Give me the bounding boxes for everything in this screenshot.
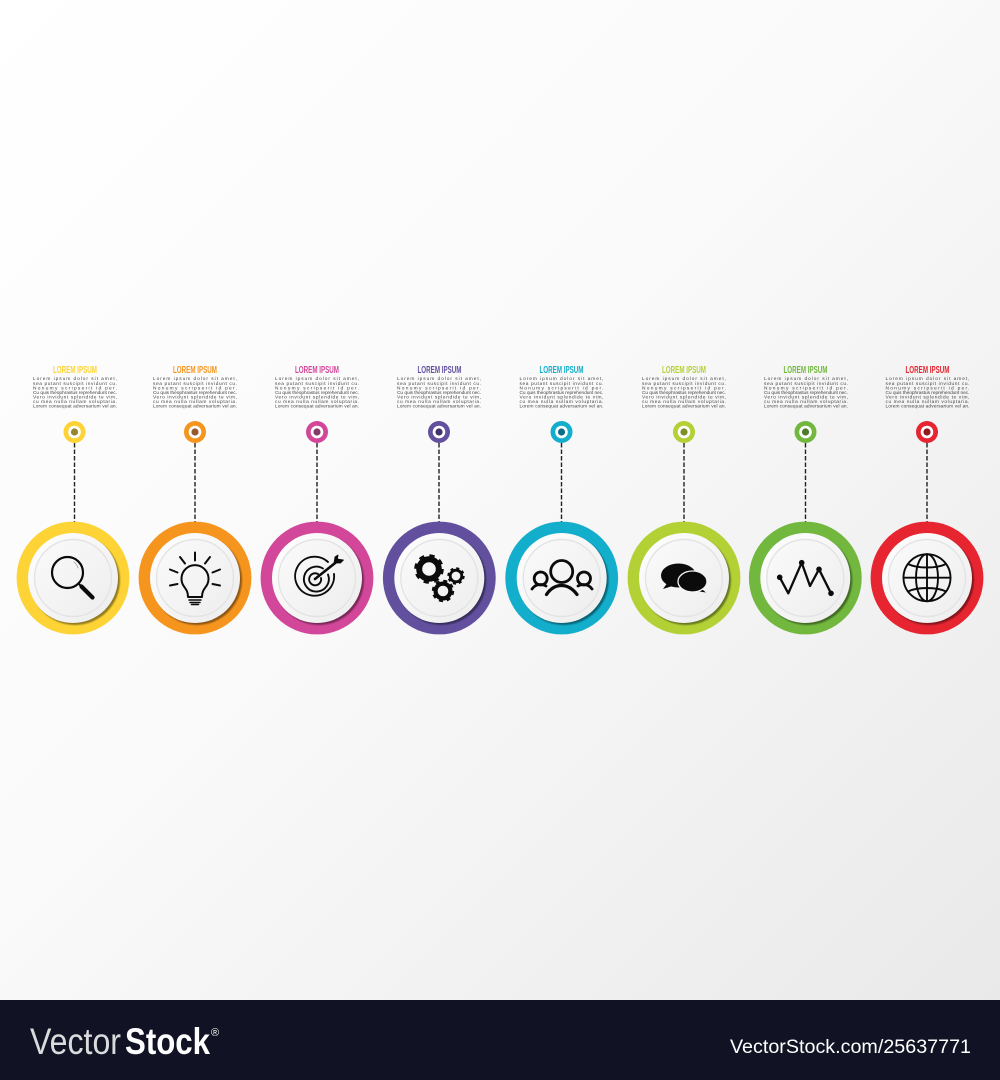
- text block: Lorem consequat adversarium vel an.: [642, 404, 726, 410]
- logo wordmark: Vector: [30, 1021, 121, 1062]
- text block: sea putant suscipit invidunt cu.: [275, 381, 359, 387]
- text block: Cu quis theophrastus reprehendunt nec.: [33, 390, 117, 396]
- marker: [184, 421, 206, 443]
- text block: cu mea nulla nullam voluptaria.: [642, 399, 726, 405]
- step 2: idea: [139, 365, 251, 634]
- ring: [17, 522, 129, 634]
- text block: Vero invidunt splendide te vim,: [153, 394, 237, 400]
- text block: [33, 376, 117, 410]
- text block: cu mea nulla nullam voluptaria.: [764, 399, 848, 405]
- ring: [871, 522, 983, 634]
- dashed connector: [926, 443, 928, 522]
- text block: Lorem consequat adversarium vel an.: [33, 404, 117, 410]
- icon: light bulb: [170, 552, 220, 604]
- text block: Cu quis theophrastus reprehendunt nec.: [520, 390, 604, 396]
- dashed connector: [438, 443, 440, 522]
- text block: Lorem ipsum dolor sit amet,: [397, 376, 481, 382]
- text block: Lorem ipsum dolor sit amet,: [153, 376, 237, 382]
- text block: [886, 376, 970, 410]
- text block: sea putant suscipit invidunt cu.: [520, 381, 604, 387]
- text block: cu mea nulla nullam voluptaria.: [153, 399, 237, 405]
- dashed connector: [74, 443, 76, 522]
- text block: Nonumy scripserit id per.: [153, 386, 237, 392]
- text block: [520, 376, 604, 410]
- text block: Vero invidunt splendide te vim,: [764, 394, 848, 400]
- step 6: chat: [628, 365, 740, 634]
- marker: [64, 421, 86, 443]
- text block: [153, 376, 237, 410]
- ring: [749, 522, 862, 634]
- text block: Cu quis theophrastus reprehendunt nec.: [886, 390, 970, 396]
- ring: [505, 522, 618, 634]
- heading: LOREM IPSUM: [540, 365, 584, 376]
- footer bar: [0, 1000, 1000, 1080]
- text block: sea putant suscipit invidunt cu.: [33, 381, 117, 387]
- icon: speech bubbles: [661, 564, 707, 592]
- text block: Lorem consequat adversarium vel an.: [886, 404, 970, 410]
- marker: [550, 421, 572, 443]
- text block: Lorem ipsum dolor sit amet,: [642, 376, 726, 382]
- text block: Nonumy scripserit id per.: [886, 386, 970, 392]
- text block: Cu quis theophrastus reprehendunt nec.: [275, 390, 359, 396]
- text block: Nonumy scripserit id per.: [642, 386, 726, 392]
- marker: [794, 421, 816, 443]
- text block: Nonumy scripserit id per.: [764, 386, 848, 392]
- heading: LOREM IPSUM: [53, 365, 97, 376]
- ring: [628, 522, 740, 634]
- icon: magnifier: [52, 557, 92, 598]
- icon: globe: [904, 554, 950, 601]
- step 4: gears: [383, 365, 496, 634]
- text block: Lorem consequat adversarium vel an.: [397, 404, 481, 410]
- dashed connector: [194, 443, 196, 522]
- text block: Lorem consequat adversarium vel an.: [275, 404, 359, 410]
- text block: cu mea nulla nullam voluptaria.: [520, 399, 604, 405]
- text block: cu mea nulla nullam voluptaria.: [33, 399, 117, 405]
- marker: [673, 421, 695, 443]
- heading: LOREM IPSUM: [906, 365, 950, 376]
- text block: Lorem ipsum dolor sit amet,: [764, 376, 848, 382]
- step 8: globe: [871, 365, 983, 634]
- heading: LOREM IPSUM: [295, 365, 339, 376]
- text block: Lorem consequat adversarium vel an.: [764, 404, 848, 410]
- text block: Lorem ipsum dolor sit amet,: [33, 376, 117, 382]
- text block: Vero invidunt splendide te vim,: [642, 394, 726, 400]
- text block: cu mea nulla nullam voluptaria.: [275, 399, 359, 405]
- text block: sea putant suscipit invidunt cu.: [886, 381, 970, 387]
- text block: Vero invidunt splendide te vim,: [886, 394, 970, 400]
- ring: [261, 522, 373, 634]
- text block: [764, 376, 848, 410]
- heading: LOREM IPSUM: [662, 365, 706, 376]
- heading: LOREM IPSUM: [418, 365, 462, 376]
- step 7: chart: [749, 365, 862, 634]
- dashed connector: [316, 443, 318, 522]
- marker: [916, 421, 938, 443]
- icon: line chart: [777, 560, 834, 596]
- dashed connector: [560, 443, 562, 522]
- logo wordmark: [30, 1021, 219, 1062]
- text block: Nonumy scripserit id per.: [275, 386, 359, 392]
- text block: Vero invidunt splendide te vim,: [275, 394, 359, 400]
- dashed connector: [683, 443, 685, 522]
- icon: gears: [416, 556, 464, 601]
- text block: Lorem ipsum dolor sit amet,: [886, 376, 970, 382]
- text block: Lorem ipsum dolor sit amet,: [275, 376, 359, 382]
- text block: sea putant suscipit invidunt cu.: [153, 381, 237, 387]
- text block: Nonumy scripserit id per.: [520, 386, 604, 392]
- text block: Vero invidunt splendide te vim,: [33, 394, 117, 400]
- text block: Vero invidunt splendide te vim,: [397, 394, 481, 400]
- heading: LOREM IPSUM: [784, 365, 828, 376]
- step 1: search: [17, 365, 129, 634]
- logo wordmark: ®: [211, 1027, 219, 1039]
- text block: Lorem consequat adversarium vel an.: [153, 404, 237, 410]
- text block: Vero invidunt splendide te vim,: [520, 394, 604, 400]
- step 3: target: [261, 365, 373, 634]
- text block: [642, 376, 726, 410]
- image id: VectorStock.com/25637771: [730, 1037, 971, 1058]
- dashed connector: [804, 443, 806, 522]
- text block: cu mea nulla nullam voluptaria.: [397, 399, 481, 405]
- text block: sea putant suscipit invidunt cu.: [764, 381, 848, 387]
- text block: [275, 376, 359, 410]
- step 5: people: [505, 365, 618, 634]
- text block: cu mea nulla nullam voluptaria.: [886, 399, 970, 405]
- heading: LOREM IPSUM: [173, 365, 217, 376]
- text block: Nonumy scripserit id per.: [397, 386, 481, 392]
- text block: sea putant suscipit invidunt cu.: [642, 381, 726, 387]
- logo wordmark: Stock: [125, 1021, 210, 1062]
- text block: Cu quis theophrastus reprehendunt nec.: [397, 390, 481, 396]
- marker: [306, 421, 328, 443]
- marker: [428, 421, 450, 443]
- text block: Cu quis theophrastus reprehendunt nec.: [764, 390, 848, 396]
- ring: [139, 522, 251, 634]
- text block: sea putant suscipit invidunt cu.: [397, 381, 481, 387]
- text block: [397, 376, 481, 410]
- text block: Cu quis theophrastus reprehendunt nec.: [642, 390, 726, 396]
- text block: Cu quis theophrastus reprehendunt nec.: [153, 390, 237, 396]
- icon: people group: [532, 560, 592, 594]
- text block: Nonumy scripserit id per.: [33, 386, 117, 392]
- text block: Lorem consequat adversarium vel an.: [520, 404, 604, 410]
- text block: Lorem ipsum dolor sit amet,: [520, 376, 604, 382]
- icon: target with arrow: [295, 555, 344, 596]
- ring: [383, 522, 496, 634]
